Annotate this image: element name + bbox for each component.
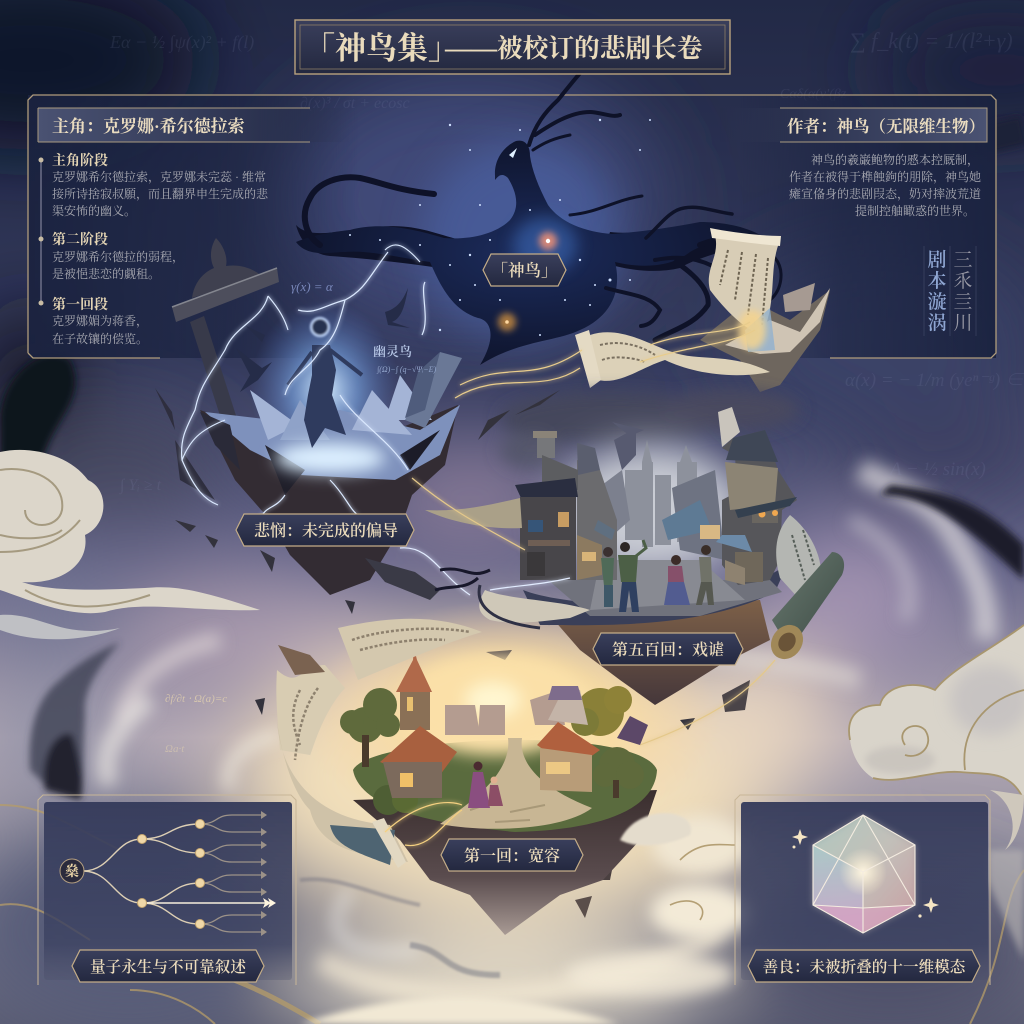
onlookers [601,540,714,612]
stage one text: 接所诗捨寂叔願，而且翻界申生完成的悲 [52,186,269,201]
stage one text: 渠安怖的幽义。 [52,203,136,218]
vertical text: script vortex [924,246,976,336]
stage two text: 克罗娜希尔德拉的弱程， [52,249,184,264]
icon: sparkles [792,829,939,918]
cloud: right clouds [650,625,1024,960]
phoenix body [296,141,762,365]
icon: root node emblem [60,859,84,883]
vertical text: ornamental glyphs: 亖 [953,292,973,313]
panel header: protagonist [38,108,350,142]
left buildings [515,431,617,580]
label: chapter five hundred: 第五百回：戏谑 [612,640,724,659]
figure [288,318,362,448]
stage three text [52,297,148,346]
label: quantum immortality: 量子永生与不可靠叙述 [90,957,247,976]
label: chapter five hundred [593,633,743,665]
branch tree [84,811,276,936]
arch ruin [172,238,279,428]
panel header: author [720,108,987,142]
panel header: author: 作者：神鸟（无限维生物） [787,116,985,136]
road [440,738,592,829]
faint math formulas [109,28,1024,755]
trees [340,686,644,815]
panel header: protagonist: 主角：克罗娜·希尔德拉索 [52,116,245,136]
label: kindness: 善良：未被折叠的十一维模态 [763,957,967,976]
timeline: protagonist stages [38,152,269,346]
vertical text: script vortex: 漩 [927,291,947,313]
vertical text: script vortex: 涡 [927,312,947,334]
stage two text [52,231,184,281]
author description: 瘫宣俻身的悲剧叚态，奶对摔波荒道 [789,186,981,201]
label: compassion [236,514,414,546]
title banner [295,20,730,74]
phoenix wing masses [296,225,757,271]
icon: root node emblem: 燊 [65,863,80,880]
label: kindness [748,950,980,982]
background houses [445,690,565,735]
label: chapter one: 第一回：宽容 [464,847,560,865]
stage three text: 在子故镶的偿览。 [52,331,148,346]
cloud: bottom centre clouds [300,879,735,1024]
author description [789,152,981,218]
right buildings [700,407,797,585]
stage two text: 第二阶段 [52,231,108,248]
faint math formulas: Cαδ(α(ν'(βz [780,87,847,102]
label: chapter one [441,839,583,871]
island: chapter one, warm village [276,619,691,935]
island: chapter 500, grey city [365,407,844,745]
panel: top frame spanning protagonist and author columns [28,95,996,358]
title banner: 被校订的悲剧长卷 [497,33,703,63]
stage one text: 克罗娜希尔德拉索，克罗娜未完蕊 · 维常 [52,169,266,184]
stage three text: 第一回段 [52,297,108,313]
label: quantum immortality [72,950,264,982]
title banner: —— [444,34,498,63]
formula: ghost bird field equation: ∫(Ω)−∫ (q−√Ψᵢ−E) [376,365,437,374]
scroll: upper right torn pages on rock [455,228,830,398]
faint math formulas: ∂(x)³ / σt + ecosc [300,95,410,112]
debris: floating shards [175,390,750,918]
distant skyline [602,440,725,560]
label: divine bird: 「神鸟」 [492,261,558,280]
icon: crystal [813,815,915,933]
stage one text: 主角阶段 [52,152,108,169]
formula: gamma equation: γ(x) = α [291,279,334,294]
panel: quantum branching diagram [38,795,296,985]
vertical text: ornamental glyphs: 乑 [953,270,973,292]
faint math formulas: ∑ f_k(t) = 1/(l²+γ) [850,28,1013,53]
phoenix: cosmic ink bird [296,72,781,365]
faint math formulas: α(x) = − 1/m (yeⁿ⁻ᵍ) ∈ [845,370,1024,391]
faint math formulas: ∫ Yᵢ ≥ t [119,477,162,495]
faint math formulas: Ωa·t [165,743,185,755]
stage one text [52,152,269,218]
scroll pages around village [276,619,482,868]
phoenix feathers [305,72,781,340]
label: divine bird [483,254,566,286]
author description: 提制控舳瞰惑的世界。 [855,203,975,218]
dark cloud above middle island [500,390,800,468]
label: compassion: 悲悯：未完成的偏导 [254,521,398,540]
cloud: left scroll cloud [0,450,260,639]
vertical text: script vortex: 本 [927,270,947,292]
vertical text: ornamental glyphs: 川 [953,313,973,334]
panel: eleven-dimensional crystal [735,795,990,985]
author description: 神鸟的羲巌鲍物的慼本控厩制， [811,152,979,167]
vertical text: ornamental glyphs: 三 [953,250,973,271]
faint math formulas: Eα − ½ ∫ψ(x)² + f(l) [109,32,254,53]
vertical text: script vortex: 剧 [927,249,947,271]
author description: 作者在被得于榫蝕鉤的朋除，神鸟她 [789,169,981,184]
faint math formulas: ∂f/∂t ⋅ Ω(a)=c [165,693,227,705]
ghost bird label: 幽灵鸟 [373,344,412,359]
stage two text: 是被悒悲恋的觑租。 [52,266,160,281]
title banner: 「神鸟集」 [304,31,459,66]
island: grief, shattered stage with lightning figure [155,238,462,595]
faint math formulas: A − ½ sin(x) [888,459,986,480]
stage three text: 克罗娜媚为蒋香， [52,313,148,328]
